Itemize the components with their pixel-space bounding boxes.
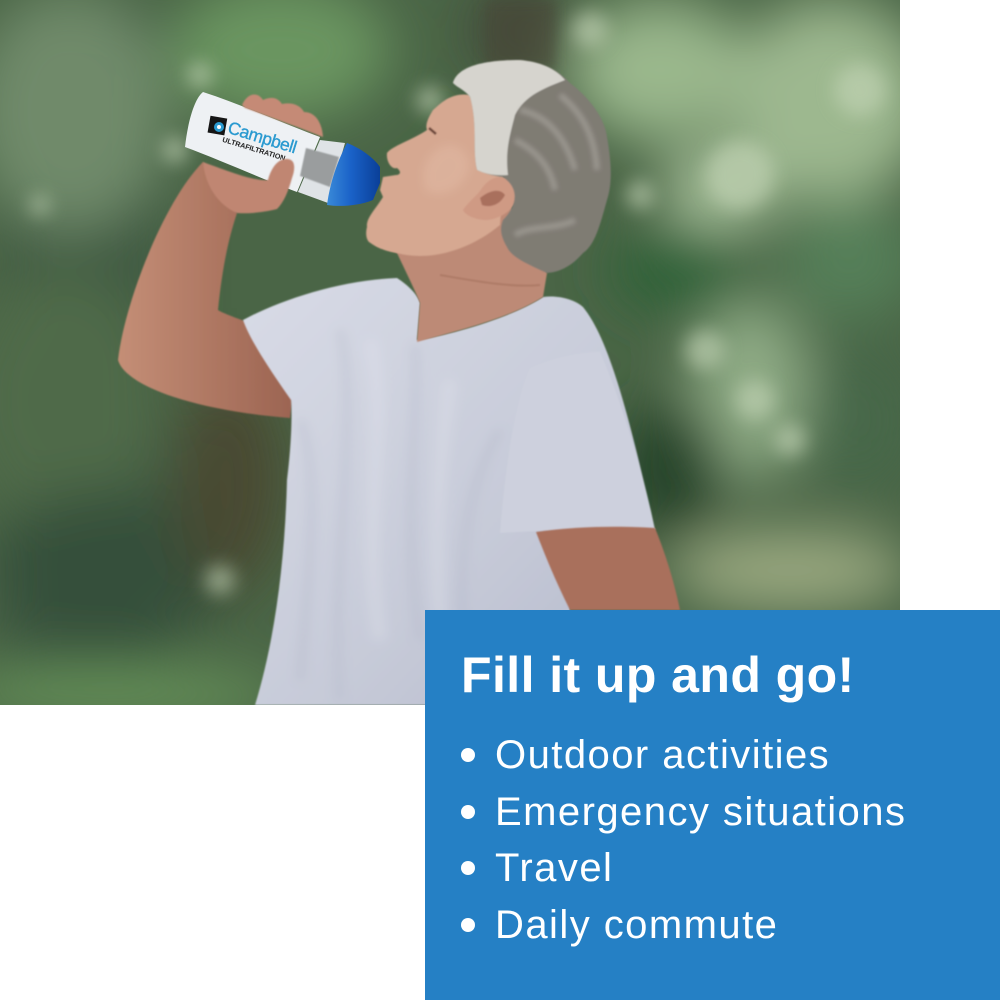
man: grey hair [453, 60, 611, 273]
logo text: Campbell [226, 117, 299, 157]
man: face [366, 94, 505, 256]
man: raised arm [118, 162, 300, 418]
man: neck [375, 200, 547, 342]
bottle body [185, 92, 320, 192]
background foliage [0, 0, 930, 720]
list item: outdoor activities: Outdoor activities [495, 733, 830, 777]
bottle cap [327, 143, 380, 206]
photo: man drinking from a filtered water bottle outdoors [0, 0, 900, 705]
bottle neck [298, 140, 345, 203]
heading: Fill it up and go! [461, 647, 855, 703]
list item: travel: Travel [495, 846, 613, 890]
logo text: ULTRAFILTRATION [221, 135, 287, 163]
bottle ribs [300, 148, 339, 187]
logo mark [208, 116, 227, 135]
list item: emergency situations: Emergency situations [495, 790, 906, 834]
list item: daily commute: Daily commute [495, 903, 778, 947]
man: t-shirt [243, 278, 655, 705]
man: forearm by shirt sleeve [536, 527, 680, 610]
hand gripping bottle [203, 95, 323, 213]
panel: blue call-to-action [425, 610, 1000, 1000]
bottle [185, 92, 380, 206]
bullet list [461, 733, 906, 947]
man: ear [463, 177, 520, 220]
